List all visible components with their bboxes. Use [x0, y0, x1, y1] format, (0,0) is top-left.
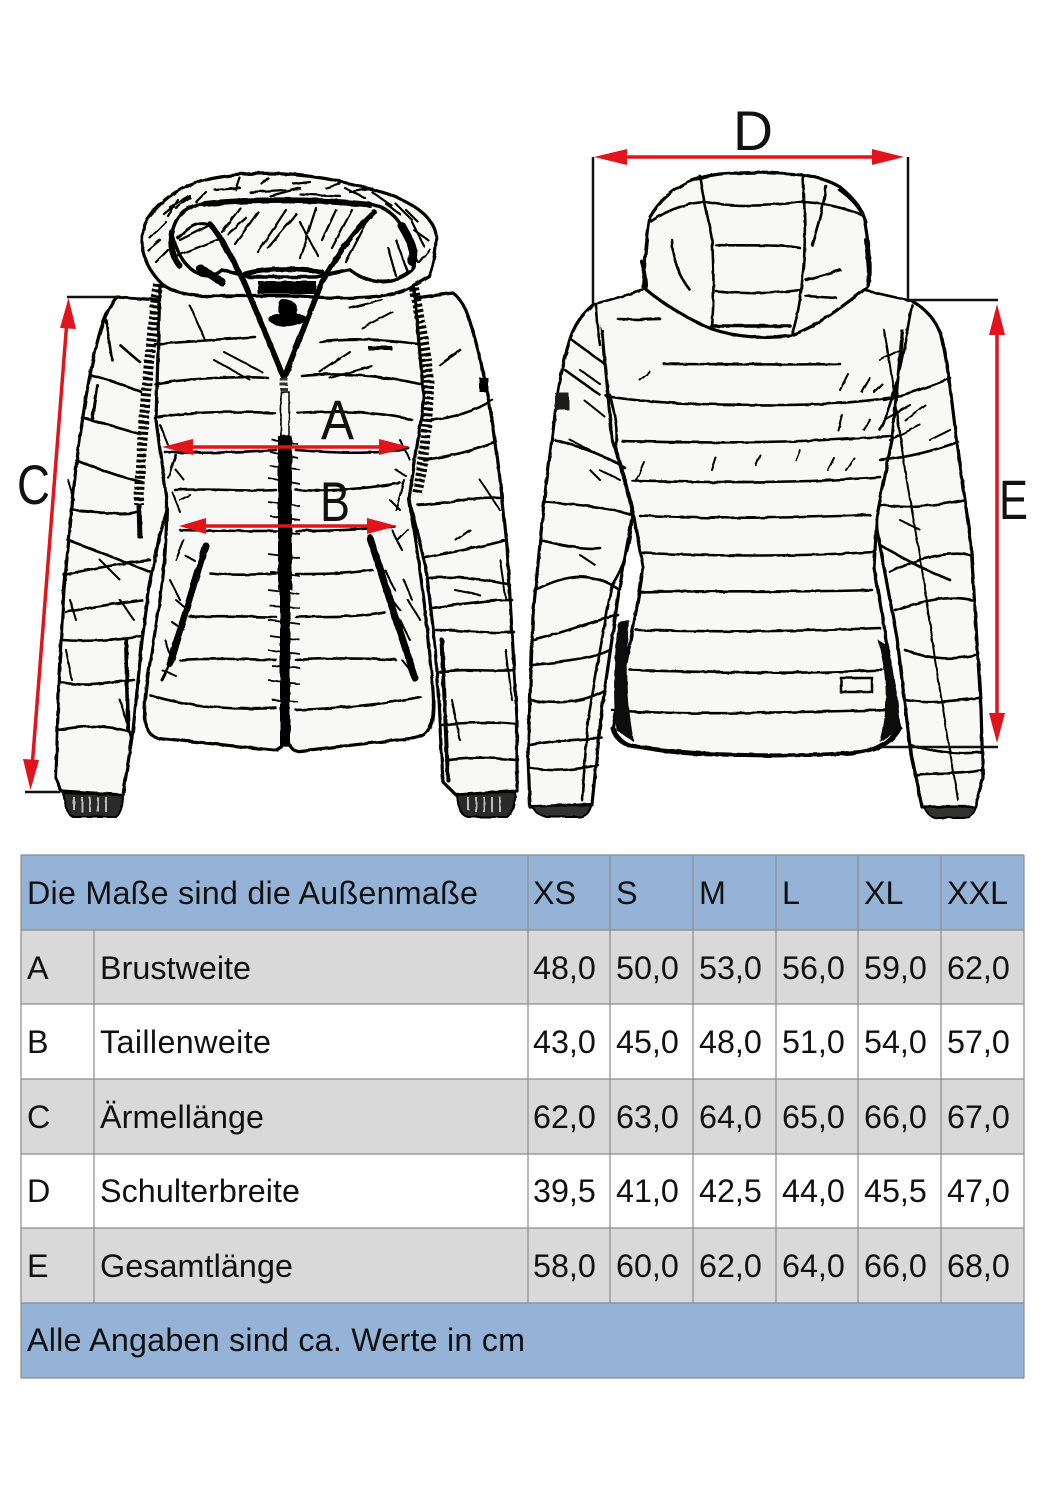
- arrow E: [995, 325, 999, 722]
- row B: B: [27, 1024, 49, 1060]
- front pockets: [162, 538, 415, 680]
- illustration: front of jacket: [56, 173, 517, 817]
- row D: D: [27, 1173, 50, 1209]
- extension lines E: [880, 300, 998, 747]
- letter D: D: [733, 99, 773, 162]
- header row: L: [782, 875, 800, 911]
- sleeve badge: [480, 378, 488, 392]
- letter A: A: [321, 388, 355, 451]
- row D: 44,0: [782, 1173, 845, 1209]
- front body: [145, 286, 433, 751]
- row A: 56,0: [782, 950, 845, 986]
- row E: 68,0: [947, 1248, 1010, 1284]
- back side shadow left: [614, 620, 634, 742]
- row C: 67,0: [947, 1099, 1010, 1135]
- drawstrings: [139, 284, 429, 538]
- collar V seam: [210, 212, 374, 378]
- header row: S: [616, 875, 638, 911]
- chest badge: [368, 346, 392, 350]
- header row: XS: [533, 875, 576, 911]
- row E: 64,0: [782, 1248, 845, 1284]
- row B: 43,0: [533, 1024, 596, 1060]
- row C: [27, 1099, 1010, 1135]
- row D: 41,0: [616, 1173, 679, 1209]
- hood lining: [172, 199, 415, 281]
- dimension B: [179, 470, 397, 534]
- row A: [27, 950, 1010, 986]
- row C: C: [27, 1099, 50, 1135]
- row A: 62,0: [947, 950, 1010, 986]
- back sleeve lines: [530, 304, 982, 800]
- dimension D: [593, 99, 908, 304]
- back hem badge: [841, 678, 872, 692]
- row D: Schulterbreite: [100, 1173, 300, 1209]
- front quilting lines: [150, 337, 420, 710]
- row B: 54,0: [864, 1024, 927, 1060]
- row C: 62,0: [533, 1099, 596, 1135]
- row B: 45,0: [616, 1024, 679, 1060]
- back body: [600, 304, 905, 756]
- front sleeve lines: [58, 320, 516, 780]
- row B: Taillenweite: [100, 1024, 271, 1060]
- header row: Die Maße sind die Außenmaße: [27, 875, 478, 911]
- back marks: [570, 350, 950, 565]
- row B: 57,0: [947, 1024, 1010, 1060]
- row B: [27, 1024, 1010, 1060]
- header row: M: [699, 875, 726, 911]
- front left cuff: [63, 793, 123, 817]
- row A: A: [27, 950, 49, 986]
- extension lines C: [25, 297, 118, 792]
- front right cuff: [457, 792, 515, 817]
- row B: 48,0: [699, 1024, 762, 1060]
- back right sleeve: [870, 301, 983, 807]
- back right cuff: [924, 807, 975, 818]
- row A: 53,0: [699, 950, 762, 986]
- header row: XXL: [947, 875, 1008, 911]
- row B: 51,0: [782, 1024, 845, 1060]
- row C: 64,0: [699, 1099, 762, 1135]
- row E: E: [27, 1248, 49, 1284]
- row D: 39,5: [533, 1173, 596, 1209]
- header row: [27, 875, 1008, 911]
- row E: 58,0: [533, 1248, 596, 1284]
- row D: 45,5: [864, 1173, 927, 1209]
- size table: [21, 855, 1024, 1378]
- front marks: [66, 300, 512, 740]
- illustration: back of jacket: [528, 173, 983, 818]
- back quilting lines: [606, 319, 902, 755]
- row C: 63,0: [616, 1099, 679, 1135]
- zipper: [268, 378, 300, 745]
- hood centre panel: [642, 176, 869, 334]
- row E: Gesamtlänge: [100, 1248, 293, 1284]
- row D: 42,5: [699, 1173, 762, 1209]
- back left sleeve: [528, 304, 640, 807]
- row D: [27, 1173, 1010, 1209]
- dimension A: [162, 388, 410, 455]
- back hood: [643, 173, 870, 337]
- header row: XL: [864, 875, 904, 911]
- front left sleeve: [56, 297, 170, 795]
- row C: Ärmellänge: [100, 1099, 264, 1135]
- hood texture: [148, 178, 430, 282]
- row E: 66,0: [864, 1248, 927, 1284]
- row E: 62,0: [699, 1248, 762, 1284]
- dimension E: [880, 300, 1028, 747]
- arrow C: [32, 320, 67, 768]
- dimension C: [17, 297, 118, 792]
- row A: 59,0: [864, 950, 927, 986]
- row E: 60,0: [616, 1248, 679, 1284]
- row A: 50,0: [616, 950, 679, 986]
- row A: Brustweite: [100, 950, 251, 986]
- back side shadow right: [878, 640, 899, 742]
- arrow B: [200, 524, 378, 528]
- footer note: Alle Angaben sind ca. Werte in cm: [27, 1322, 525, 1358]
- front hood: [142, 173, 436, 298]
- letter C: C: [17, 453, 50, 516]
- back shoulder yoke: [594, 290, 912, 330]
- row D: 47,0: [947, 1173, 1010, 1209]
- table backgrounds: [21, 855, 1024, 1378]
- row A: 48,0: [533, 950, 596, 986]
- row C: 66,0: [864, 1099, 927, 1135]
- extension lines D: [593, 157, 908, 304]
- arrow D: [615, 155, 882, 159]
- row C: 65,0: [782, 1099, 845, 1135]
- front right sleeve: [400, 293, 517, 795]
- letter B: B: [320, 470, 350, 533]
- neck label: [258, 281, 316, 327]
- back left cuff: [532, 805, 591, 817]
- letter E: E: [999, 468, 1028, 531]
- row E: [27, 1248, 1010, 1284]
- arrow A: [185, 445, 388, 449]
- back sleeve badge: [555, 393, 569, 410]
